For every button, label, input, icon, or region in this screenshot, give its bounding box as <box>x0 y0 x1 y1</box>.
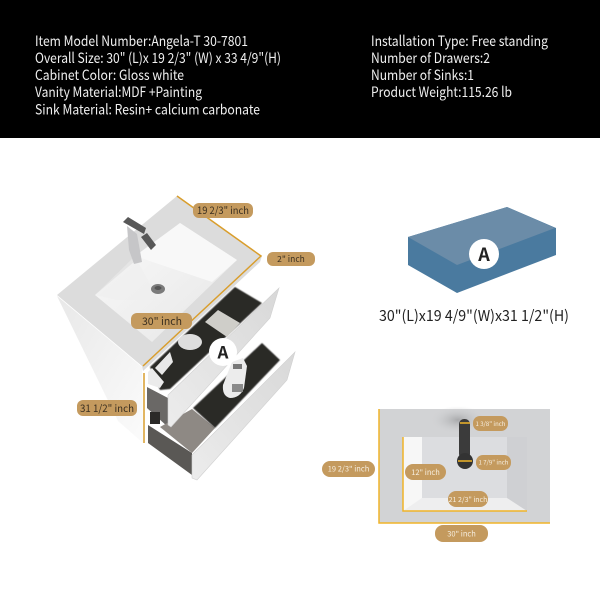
marker A: A <box>217 338 229 364</box>
faucet shadow <box>430 406 486 434</box>
right specification text: Number of Drawers:2 <box>371 48 490 68</box>
soap bottle <box>223 358 247 398</box>
marker A <box>469 239 499 269</box>
lower drawer interior <box>193 343 280 428</box>
left specification text: Sink Material: Resin+ calcium carbonate <box>35 100 260 120</box>
small white box <box>148 368 164 388</box>
label: overall depth: 19 2/3" inch <box>328 464 369 474</box>
left specification text: Overall Size: 30" (L)x 19 2/3" (W) x 33 4/9"(H) <box>35 48 281 68</box>
dimension lines <box>143 196 261 443</box>
right specification text <box>371 31 548 102</box>
label: drain width <box>476 455 511 470</box>
storage box <box>205 310 240 337</box>
upper drawer side <box>147 387 168 427</box>
right specification text: Number of Sinks:1 <box>371 65 474 85</box>
left specification text: Item Model Number:Angela-T 30-7801 <box>35 31 248 51</box>
label: depth: 19 2/3" inch <box>197 202 249 217</box>
label: basin width <box>448 491 488 507</box>
label: overall width <box>435 525 488 542</box>
cabinet left side <box>57 296 143 443</box>
label: basin width: 21 2/3" inch <box>449 495 487 505</box>
label: faucet width <box>473 416 508 431</box>
header band <box>0 0 600 138</box>
left specification text: Cabinet Color: Gloss white <box>35 65 184 85</box>
label: height: 31 1/2" inch <box>80 400 134 415</box>
label: width <box>131 313 192 329</box>
round tray <box>178 334 202 350</box>
top view sink diagram <box>322 406 550 542</box>
upper drawer front <box>168 288 279 427</box>
right specification text: Installation Type: Free standing <box>371 31 548 51</box>
sink basin <box>95 223 237 342</box>
vanity cabinet illustration <box>57 196 315 480</box>
lower drawer front <box>192 352 295 480</box>
drawer block diagram <box>408 207 556 293</box>
faucet <box>123 217 156 264</box>
label: drain width: 1 7/9" inch <box>479 458 509 466</box>
label: overall depth <box>322 461 375 477</box>
lower drawer towel <box>160 409 215 453</box>
label: faucet width: 1 3/8" inch <box>476 419 506 428</box>
marker A <box>209 338 237 366</box>
label: overall width: 30" inch <box>447 528 476 540</box>
upper drawer interior <box>150 287 262 390</box>
drawer dimensions text: 30"(L)x19 4/9"(W)x31 1/2"(H) <box>379 305 569 326</box>
label: basin depth: 12" inch <box>411 467 440 478</box>
faucet <box>457 419 473 469</box>
right specification text: Product Weight:115.26 lb <box>371 82 512 102</box>
drain <box>151 284 165 294</box>
lower drawer side <box>148 425 192 475</box>
label: width: 30" inch <box>142 314 182 329</box>
basin <box>403 437 527 511</box>
dark object <box>150 412 160 424</box>
marker A: A <box>477 241 490 267</box>
left specification text: Vanity Material:MDF +Painting <box>35 82 202 102</box>
label: top thickness: 2" inch <box>277 253 305 265</box>
top surface <box>57 196 262 371</box>
small bottle <box>155 352 173 375</box>
dimension lines <box>379 409 550 523</box>
left specification text <box>35 31 281 120</box>
label: top thickness <box>267 252 315 266</box>
label: basin depth <box>405 464 446 480</box>
